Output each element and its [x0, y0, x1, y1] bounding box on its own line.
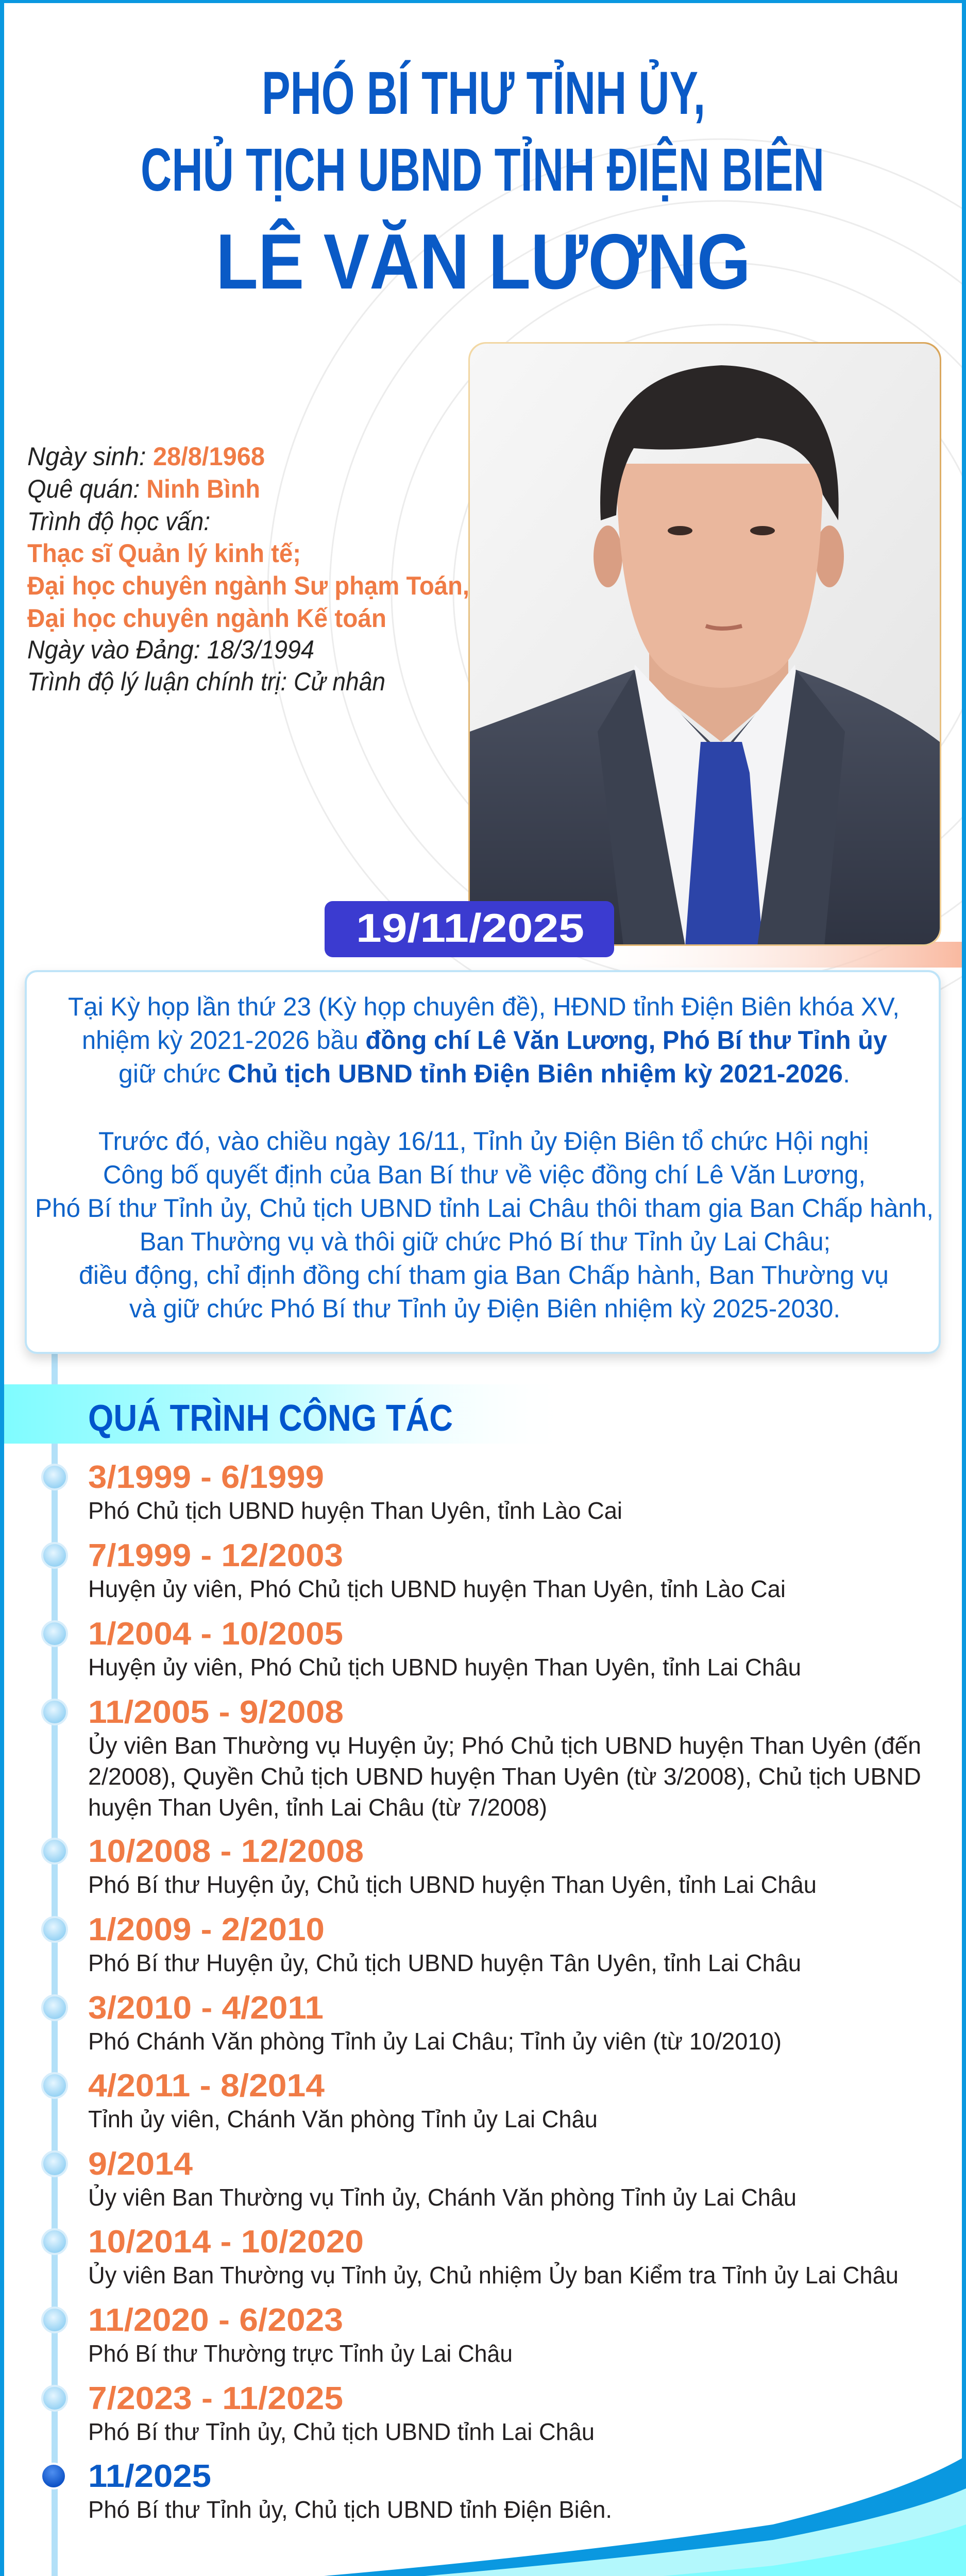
timeline items: Ủy viên Ban Thường vụ Tỉnh ủy, Chánh Văn phòng Tỉnh ủy Lai Châu	[88, 2184, 796, 2211]
personal info: Thạc sĩ Quản lý kinh tế;	[27, 539, 301, 568]
timeline items: Ủy viên Ban Thường vụ Tỉnh ủy, Chủ nhiệm Ủy ban Kiểm tra Tỉnh ủy Lai Châu	[88, 2262, 899, 2289]
summary box: nhiệm kỳ 2021-2026 bầu đồng chí Lê Văn Lương, Phó Bí thư Tỉnh ủy	[82, 1026, 887, 1055]
timeline items: 11/2020 - 6/2023	[88, 2302, 343, 2338]
date badge	[325, 901, 614, 957]
peach strip	[567, 942, 962, 968]
summary box	[26, 971, 940, 1353]
background drum pattern	[268, 139, 966, 1046]
timeline items: Phó Bí thư Thường trực Tỉnh ủy Lai Châu	[88, 2340, 513, 2367]
timeline line	[52, 1353, 58, 2576]
summary box: giữ chức Chủ tịch UBND tỉnh Điện Biên nhiệm kỳ 2021-2026.	[118, 1059, 850, 1088]
summary box: Ban Thường vụ và thôi giữ chức Phó Bí thư Tỉnh ủy Lai Châu;	[140, 1227, 831, 1256]
timeline items: Phó Bí thư Tỉnh ủy, Chủ tịch UBND tỉnh Lai Châu	[88, 2418, 595, 2445]
footer wave	[0, 2456, 966, 2576]
timeline items: Tỉnh ủy viên, Chánh Văn phòng Tỉnh ủy Lai Châu	[88, 2106, 598, 2132]
title: LÊ VĂN LƯƠNG	[216, 218, 751, 306]
timeline items: 4/2011 - 8/2014	[88, 2068, 325, 2104]
timeline items: Ủy viên Ban Thường vụ Huyện ủy; Phó Chủ tịch UBND huyện Than Uyên (đến	[88, 1732, 921, 1759]
date badge: 19/11/2025	[356, 905, 584, 951]
section heading band: QUÁ TRÌNH CÔNG TÁC	[88, 1397, 453, 1439]
timeline items: Phó Chánh Văn phòng Tỉnh ủy Lai Châu; Tỉnh ủy viên (từ 10/2010)	[88, 2028, 782, 2055]
personal info: Ngày vào Đảng: 18/3/1994	[27, 635, 314, 664]
timeline items: Huyện ủy viên, Phó Chủ tịch UBND huyện Than Uyên, tỉnh Lai Châu	[88, 1654, 801, 1681]
summary box: Phó Bí thư Tỉnh ủy, Chủ tịch UBND tỉnh Lai Châu thôi tham gia Ban Chấp hành,	[35, 1194, 934, 1223]
section heading band	[4, 1384, 571, 1444]
timeline items: 11/2005 - 9/2008	[88, 1694, 344, 1730]
personal info: Trình độ lý luận chính trị: Cử nhân	[27, 667, 385, 696]
summary box: Trước đó, vào chiều ngày 16/11, Tỉnh ủy Điện Biên tổ chức Hội nghị	[98, 1127, 869, 1156]
personal info: Đại học chuyên ngành Sư phạm Toán,	[27, 571, 469, 600]
timeline items: huyện Than Uyên, tỉnh Lai Châu (từ 7/2008)	[88, 1794, 547, 1821]
personal info: Ngày sinh: 28/8/1968	[27, 442, 265, 471]
title: PHÓ BÍ THƯ TỈNH ỦY,	[262, 59, 705, 127]
personal info: Đại học chuyên ngành Kế toán	[27, 604, 386, 633]
timeline items: 3/1999 - 6/1999	[88, 1460, 324, 1495]
timeline items: Phó Bí thư Huyện ủy, Chủ tịch UBND huyện Than Uyên, tỉnh Lai Châu	[88, 1871, 817, 1898]
timeline items: 7/2023 - 11/2025	[88, 2381, 343, 2416]
timeline items: Phó Bí thư Tỉnh ủy, Chủ tịch UBND tỉnh Điện Biên.	[88, 2496, 612, 2523]
timeline bullets	[41, 1465, 67, 2488]
timeline items: 11/2025	[88, 2459, 211, 2494]
personal info: Trình độ học vấn:	[27, 507, 210, 536]
summary box: điều động, chỉ định đồng chí tham gia Ban Chấp hành, Ban Thường vụ	[79, 1261, 889, 1290]
timeline items: 10/2008 - 12/2008	[88, 1834, 364, 1869]
timeline items: Huyện ủy viên, Phó Chủ tịch UBND huyện Than Uyên, tỉnh Lào Cai	[88, 1575, 786, 1602]
timeline items: 3/2010 - 4/2011	[88, 1990, 324, 2026]
timeline items: 1/2004 - 10/2005	[88, 1616, 343, 1652]
personal info	[27, 442, 469, 696]
timeline items: 10/2014 - 10/2020	[88, 2224, 364, 2260]
personal info: Quê quán: Ninh Bình	[27, 474, 260, 503]
timeline items: 9/2014	[88, 2146, 193, 2182]
timeline items: Phó Chủ tịch UBND huyện Than Uyên, tỉnh Lào Cai	[88, 1497, 622, 1524]
timeline items: 7/1999 - 12/2003	[88, 1538, 343, 1573]
summary box: Tại Kỳ họp lần thứ 23 (Kỳ họp chuyên đề), HĐND tỉnh Điện Biên khóa XV,	[68, 992, 900, 1021]
timeline items	[88, 1460, 921, 2523]
timeline items: 1/2009 - 2/2010	[88, 1912, 325, 1947]
title	[141, 59, 824, 306]
summary box: Công bố quyết định của Ban Bí thư về việc đồng chí Lê Văn Lương,	[103, 1160, 866, 1189]
timeline items: Phó Bí thư Huyện ủy, Chủ tịch UBND huyện Tân Uyên, tỉnh Lai Châu	[88, 1950, 801, 1976]
photo frame	[468, 342, 941, 946]
timeline items: 2/2008), Quyền Chủ tịch UBND huyện Than Uyên (từ 3/2008), Chủ tịch UBND	[88, 1763, 921, 1790]
summary box: và giữ chức Phó Bí thư Tỉnh ủy Điện Biên nhiệm kỳ 2025-2030.	[129, 1294, 840, 1323]
